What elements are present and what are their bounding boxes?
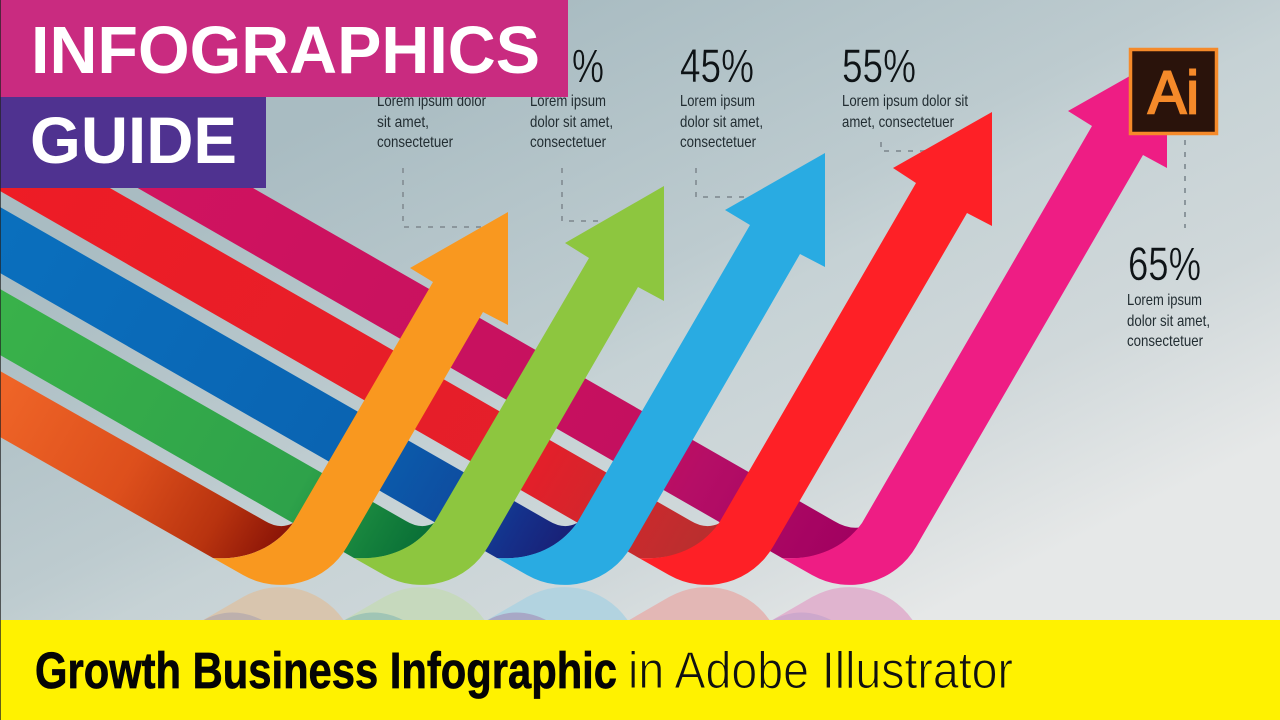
heading: GUIDE [0, 97, 266, 188]
footer title bar [0, 620, 1280, 720]
band: green [0, 289, 454, 558]
label: 55% [842, 39, 968, 131]
label: second column [530, 39, 613, 151]
label: first column [377, 93, 487, 151]
reflections under arrows [186, 587, 916, 630]
label: 65%: consectetuer [1127, 333, 1204, 350]
band: red [0, 125, 740, 558]
rising arrows [213, 55, 1167, 585]
percentage labels [377, 39, 1210, 350]
arrow: orange [213, 212, 508, 585]
label: 45%: consectetuer [680, 134, 757, 151]
label: 45%: 45% [680, 39, 754, 92]
label: 55%: Lorem ipsum dolor sit [842, 93, 968, 110]
band: blue [0, 207, 597, 558]
arrow: green [354, 186, 664, 585]
footer title bar: in Adobe Illustrator [628, 642, 1013, 700]
label: second column: % [572, 39, 604, 92]
band: crimson [0, 43, 880, 558]
band: orange [0, 371, 313, 558]
label: first column: sit amet, [377, 114, 429, 131]
label: 65%: Lorem ipsum [1127, 292, 1202, 309]
label: 55%: amet, consectetuer [842, 114, 955, 131]
arrow: pink [782, 55, 1167, 585]
arrow: red [639, 112, 992, 585]
label: second column: dolor sit amet, [530, 114, 613, 131]
label: 45% [680, 39, 763, 151]
dashed leader lines [403, 140, 1185, 228]
label: 65%: dolor sit amet, [1127, 313, 1210, 330]
label: first column: Lorem ipsum dolor [377, 93, 487, 110]
icon: Adobe Illustrator [1130, 50, 1216, 134]
label: second column: consectetuer [530, 134, 607, 151]
heading: INFOGRAPHICS [0, 0, 568, 97]
label: 45%: dolor sit amet, [680, 114, 763, 131]
heading: GUIDE: GUIDE [30, 103, 237, 177]
label: 45%: Lorem ipsum [680, 93, 755, 110]
arrow: blue [497, 153, 825, 585]
footer title bar: Growth Business Infographic [35, 642, 617, 699]
label: 65%: 65% [1128, 237, 1201, 290]
diagonal bands [0, 43, 880, 558]
label: 65% [1127, 237, 1210, 350]
label: 55%: 55% [842, 39, 916, 92]
icon: Adobe Illustrator: Ai [1148, 59, 1199, 126]
label: first column: consectetuer [377, 134, 454, 151]
heading: INFOGRAPHICS: INFOGRAPHICS [31, 13, 540, 88]
label: second column: Lorem ipsum [530, 93, 606, 110]
